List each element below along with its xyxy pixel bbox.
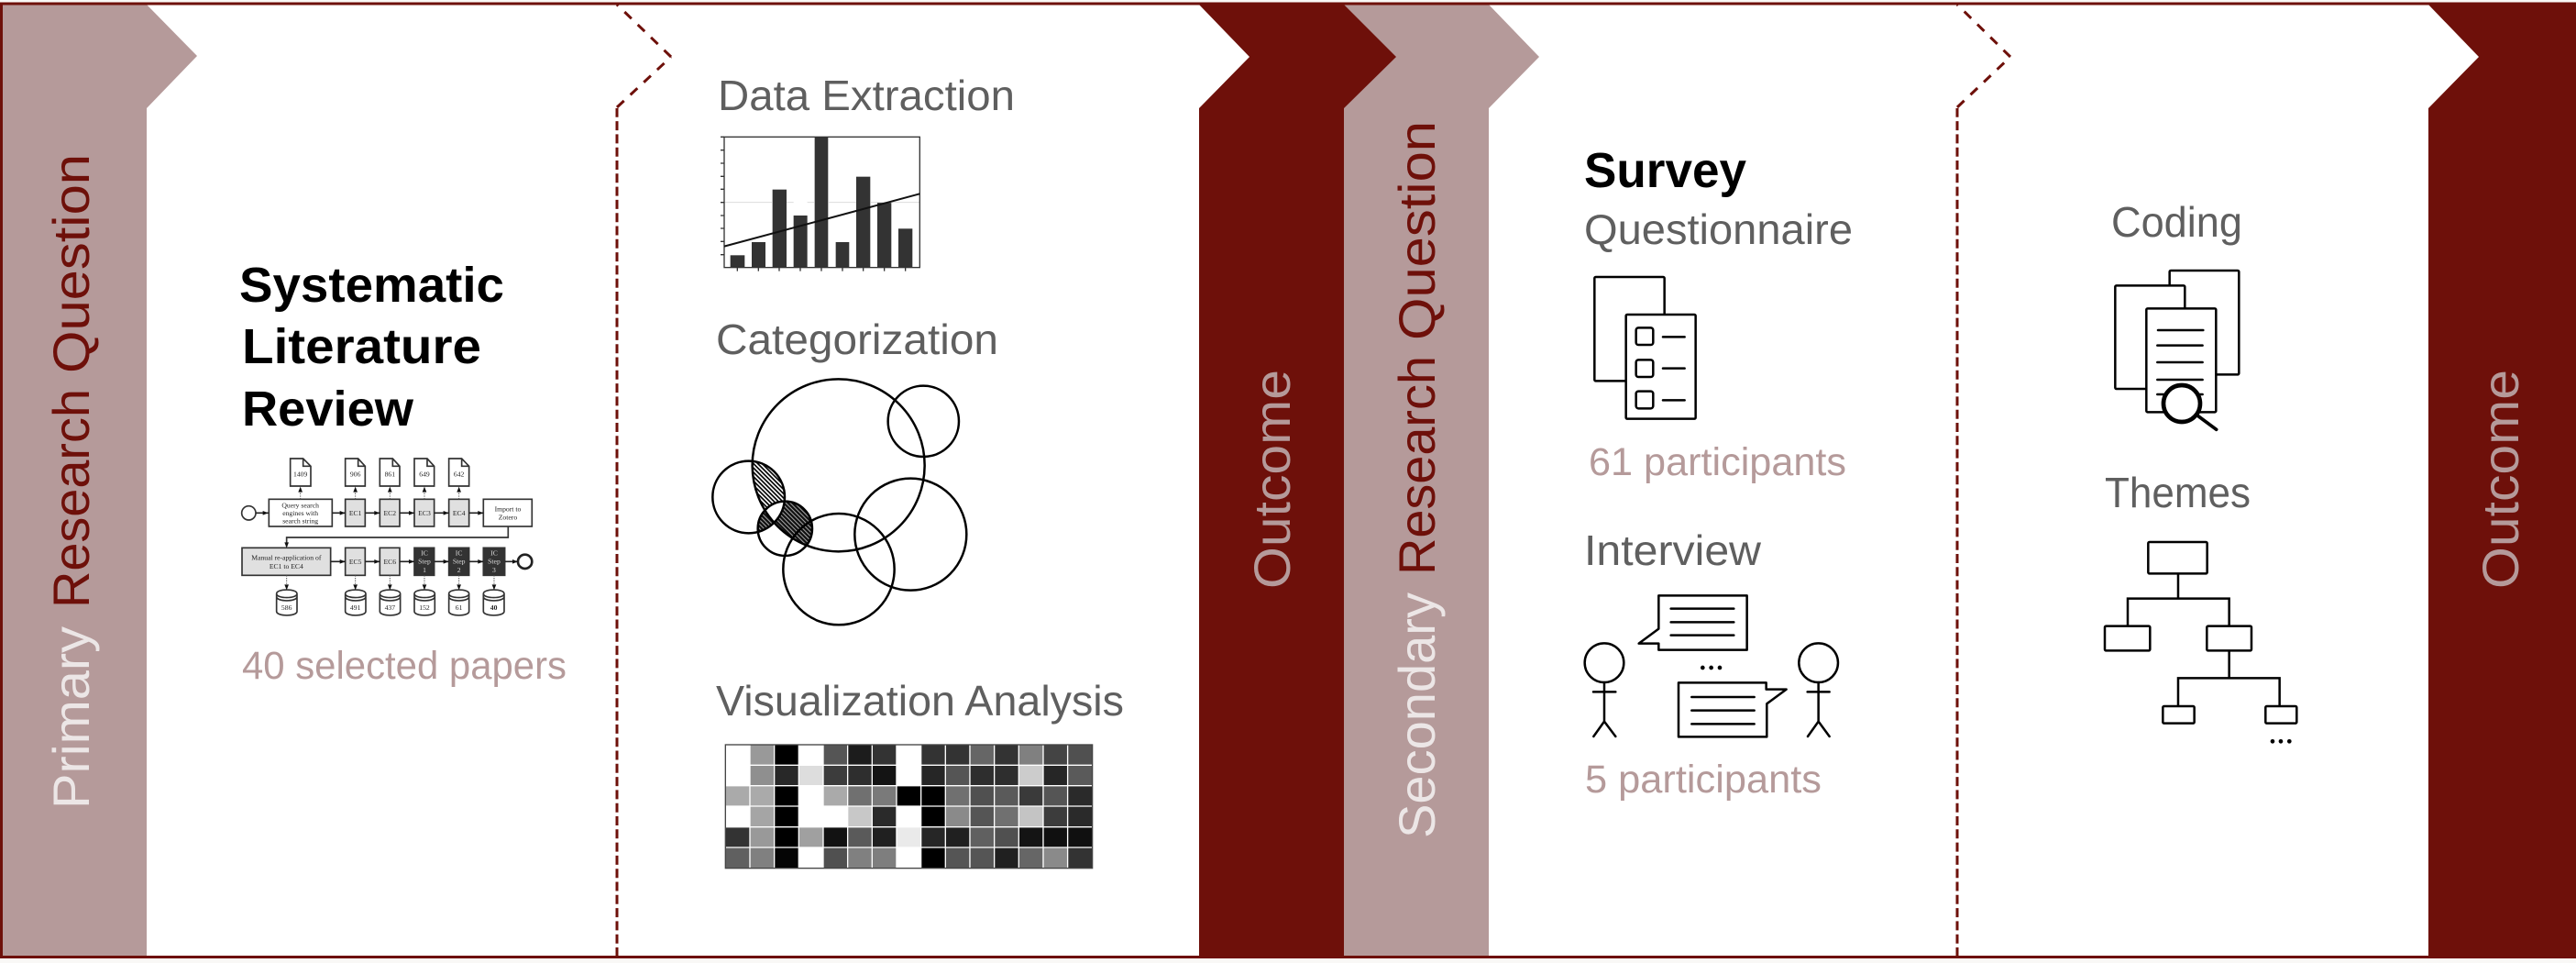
heading: systematic literature review [239,258,504,437]
flow chart: Manual re-application of [251,554,322,562]
heading: categorization: Categorization [716,315,998,363]
flow chart: EC6 [384,558,396,566]
flow chart: EC1 to EC4 [270,562,303,570]
heading: questionnaire: Questionnaire [1584,205,1853,253]
flow chart: 906 [350,470,361,478]
label: outcome 2: Outcome [2471,370,2529,589]
label: primary research question: Research [42,389,100,608]
heading: themes: Themes [2105,469,2251,516]
flow chart: engines with [282,509,318,517]
band: primary research question [3,5,197,957]
heat map [725,745,1093,869]
heading: interview: Interview [1584,526,1762,574]
flow chart: IC [490,549,498,558]
dashed arrow divider 2 [1957,5,2010,957]
bar chart [721,137,919,271]
flow chart: IC [421,549,428,558]
venn diagram [711,378,968,625]
flow chart: 61 [456,603,463,612]
flow chart: 586 [281,603,292,612]
flow chart: Zotero [499,514,517,522]
flow chart: EC4 [453,509,466,517]
flow chart: Import to [495,504,521,513]
band: outcome 2 [2428,5,2576,957]
flow chart: search string [282,517,318,526]
flow chart: 642 [454,470,465,478]
heading: visualization analysis: Visualization Analysis [716,677,1124,725]
band: outcome 1 [1199,5,1396,957]
flow chart: 491 [350,603,361,612]
flow chart: EC1 [349,509,362,517]
flow chart: 649 [419,470,430,478]
heading: coding: Coding [2111,198,2242,246]
label: primary research question [42,154,100,809]
icon: themes tree [2105,542,2296,744]
caption: 40 selected papers: 40 selected papers [242,644,567,688]
flow chart: EC2 [384,509,396,517]
heading: systematic literature review: Systematic [239,258,504,313]
flow chart: 861 [385,470,395,478]
heading: data extraction: Data Extraction [718,72,1015,119]
icon: questionnaire [1594,277,1696,419]
dashed arrow divider 1 [617,5,671,957]
flow chart: Query search [281,501,319,509]
label: secondary research question: Research [1388,356,1446,575]
panel: systematic literature review [239,258,567,688]
flow chart [242,459,532,615]
flow chart: IC [456,549,462,558]
label: secondary research question: Secondary [1388,592,1446,838]
flow chart: EC3 [418,509,431,517]
flow chart: 40 [490,603,498,612]
heading: systematic literature review: Literature [242,319,481,374]
caption: 5 participants: 5 participants [1585,758,1822,802]
label: outcome 1: Outcome [1243,370,1301,589]
flow chart: Step [453,558,466,566]
flow chart: 2 [457,566,461,574]
flow chart: 437 [385,603,395,612]
flow chart: 152 [419,603,430,612]
heading: systematic literature review: Review [242,382,414,437]
flow chart: 1409 [293,470,307,478]
label: secondary research question: Question [1388,121,1446,340]
band: secondary research question [1344,5,1539,957]
label: primary research question: Question [42,154,100,373]
label: primary research question: Primary [42,626,100,809]
heading: survey: Survey [1584,143,1746,198]
flow chart: 1 [423,566,426,574]
flow chart: Step [488,558,501,566]
icon: interview [1585,595,1838,736]
flow chart: 3 [492,566,496,574]
label: secondary research question [1388,121,1446,838]
flow chart: Step [418,558,431,566]
caption: 61 participants: 61 participants [1589,440,1846,484]
icon: coding [2115,271,2239,429]
flow chart: EC5 [349,558,362,566]
